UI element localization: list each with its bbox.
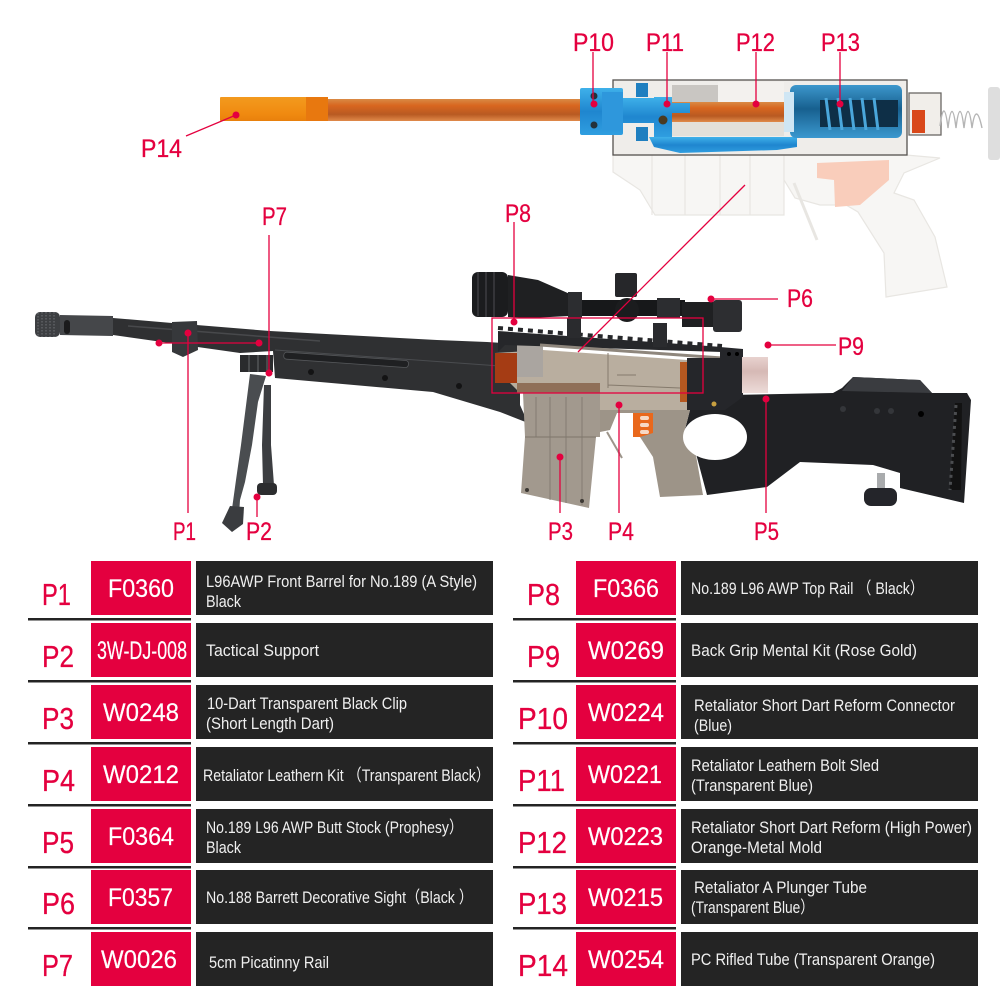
row P4 <box>28 747 493 806</box>
ghost trigger plate <box>817 160 889 207</box>
P6 decorative sight <box>472 272 742 347</box>
row P3 <box>28 685 493 744</box>
row P13 <box>513 870 978 930</box>
diagram labels: P1 <box>173 518 196 546</box>
diagram labels: P9 <box>838 333 864 361</box>
row P7: P7 <box>42 948 73 983</box>
row P11: P11 <box>518 763 565 798</box>
row P9: W0269 <box>588 637 664 665</box>
parts table: left column <box>28 561 493 986</box>
row P5: No.189 L96 AWP Butt Stock (Prophesy） <box>206 818 463 837</box>
rear receiver block <box>687 347 743 410</box>
steel side plate <box>517 337 543 377</box>
row P2: 3W-DJ-008 <box>97 637 187 665</box>
row P1: Black <box>206 592 241 611</box>
row P9 <box>513 623 978 682</box>
row P10: P10 <box>518 701 568 736</box>
row P8: F0366 <box>593 575 659 603</box>
row P3: W0248 <box>103 699 179 727</box>
exploded internals: ghost lower receiver <box>613 155 947 297</box>
row P12: W0223 <box>588 823 663 851</box>
callout lines and dots <box>156 52 844 517</box>
row P2: P2 <box>42 639 74 674</box>
row P1: P1 <box>42 577 71 612</box>
diagram labels: P4 <box>608 518 634 546</box>
row P12: P12 <box>518 825 567 860</box>
row P5: P5 <box>42 825 74 860</box>
row P11: Retaliator Leathern Bolt Sled <box>691 756 879 775</box>
P4 retaliator body <box>495 342 703 497</box>
diagram labels: P5 <box>754 518 779 546</box>
row P9: P9 <box>527 639 560 674</box>
row P3: (Short Length Dart) <box>206 714 334 733</box>
row P7: 5cm Picatinny Rail <box>209 953 329 972</box>
row P5: Black <box>206 838 241 857</box>
row P3: P3 <box>42 701 74 736</box>
row P6: F0357 <box>108 884 173 912</box>
row P13: P13 <box>518 886 567 921</box>
row P1: L96AWP Front Barrel for No.189 (A Style) <box>206 572 477 591</box>
row P10 <box>513 685 978 744</box>
row P10: (Blue) <box>694 716 732 735</box>
row P1 <box>28 561 493 620</box>
diagram labels: P10 <box>573 29 614 57</box>
row P7 <box>42 932 493 986</box>
row P10: Retaliator Short Dart Reform Connector <box>694 696 955 715</box>
row P12: Orange-Metal Mold <box>691 838 822 857</box>
row P13: Retaliator A Plunger Tube <box>694 878 867 897</box>
row P10: W0224 <box>588 699 664 727</box>
orange trigger plate <box>633 413 653 437</box>
row P9: Back Grip Mental Kit (Rose Gold) <box>691 641 917 660</box>
adjuster knob <box>864 473 897 506</box>
row P11 <box>513 747 978 806</box>
row P3: 10-Dart Transparent Black Clip <box>207 694 407 713</box>
P8 top rail <box>498 328 722 358</box>
row P11: (Transparent Blue) <box>691 776 813 795</box>
trigger window <box>617 413 633 434</box>
row P8 <box>513 561 978 620</box>
spring block and coil <box>909 93 982 135</box>
row P11: W0221 <box>588 761 662 789</box>
P12 orange metal barrel <box>672 102 786 122</box>
row P8: No.189 L96 AWP Top Rail （ Black） <box>691 579 924 598</box>
main rifle: forend and barrel <box>35 312 528 423</box>
row P6 <box>28 870 493 930</box>
row P5: F0364 <box>108 823 174 851</box>
row P7: W0026 <box>101 946 177 974</box>
row P2 <box>28 623 493 682</box>
P14 rifled tube <box>220 97 582 121</box>
P9 rose gold back grip <box>742 357 768 393</box>
P13 plunger tube <box>784 85 902 138</box>
P10 blue connector <box>580 88 623 135</box>
row P8: P8 <box>527 577 560 612</box>
diagram labels: P12 <box>736 29 775 57</box>
exploded internals: transparent frame <box>613 80 1000 160</box>
picatinny rail block <box>240 355 273 372</box>
row P6: P6 <box>42 886 75 921</box>
bipod <box>222 374 277 532</box>
P3 clip magazine <box>521 393 600 508</box>
diagram labels: P7 <box>262 203 287 231</box>
row P5 <box>28 809 493 868</box>
diagram labels: P3 <box>548 518 573 546</box>
far right disc <box>988 87 1000 160</box>
diagram labels: P11 <box>646 29 684 57</box>
row P14: W0254 <box>588 946 664 974</box>
row P14: PC Rifled Tube (Transparent Orange) <box>691 950 935 969</box>
diagram labels: P14 <box>141 135 182 163</box>
parts table: right column <box>513 561 978 986</box>
row P4: Retaliator Leathern Kit （Transparent Black） <box>203 766 490 785</box>
diagram labels <box>141 29 864 546</box>
diagram labels: P6 <box>787 285 813 313</box>
diagram labels: P8 <box>505 200 531 228</box>
row P2: Tactical Support <box>206 641 319 660</box>
row P1: F0360 <box>108 575 174 603</box>
thumbhole <box>683 414 747 460</box>
row P13: W0215 <box>588 884 663 912</box>
row P13: (Transparent Blue） <box>691 898 814 917</box>
row P14: P14 <box>518 948 568 983</box>
row P6: No.188 Barrett Decorative Sight（Black ） <box>206 888 473 907</box>
diagram labels: P2 <box>246 518 272 546</box>
row P12 <box>513 809 978 868</box>
diagram labels: P13 <box>821 29 860 57</box>
row P14 <box>518 932 978 986</box>
barrel ring <box>172 321 198 357</box>
P5 butt stock <box>683 377 971 506</box>
row P4: W0212 <box>103 761 179 789</box>
row P4: P4 <box>42 763 75 798</box>
P11 transparent blue bolt sled <box>623 83 797 153</box>
